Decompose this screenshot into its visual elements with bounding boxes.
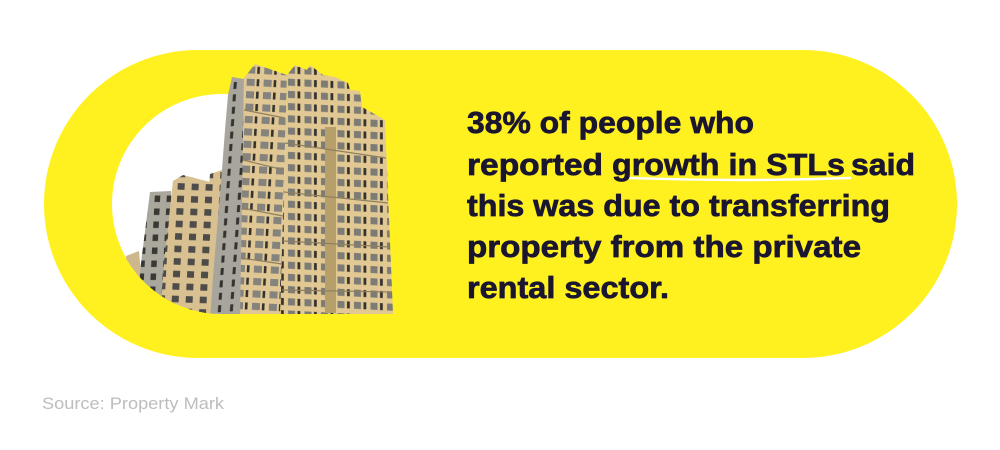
rear grey tower xyxy=(140,191,176,304)
recessed central balconies xyxy=(325,127,336,313)
source note: Source: Property Mark xyxy=(42,394,225,413)
small far tower xyxy=(126,251,142,280)
main statement: said xyxy=(851,147,915,182)
floor ledges xyxy=(241,110,392,292)
white highlight underline xyxy=(629,178,851,180)
main tower front face xyxy=(280,65,393,320)
white circular cut-out xyxy=(112,94,332,314)
main statement xyxy=(467,105,915,305)
main tower left side face xyxy=(210,77,244,320)
main tower centre face xyxy=(240,64,287,320)
main statement: rental sector. xyxy=(467,270,669,305)
main statement: reported xyxy=(467,147,603,182)
main statement: growth in STLs xyxy=(612,147,845,182)
main statement: 38% of people who xyxy=(467,105,754,140)
illustration: apartment towers xyxy=(126,64,393,320)
middle tower xyxy=(162,175,210,314)
yellow pill panel xyxy=(44,50,957,358)
narrow tower xyxy=(198,170,222,320)
main statement: this was due to transferring xyxy=(467,188,890,223)
main statement: property from the private xyxy=(467,229,861,264)
